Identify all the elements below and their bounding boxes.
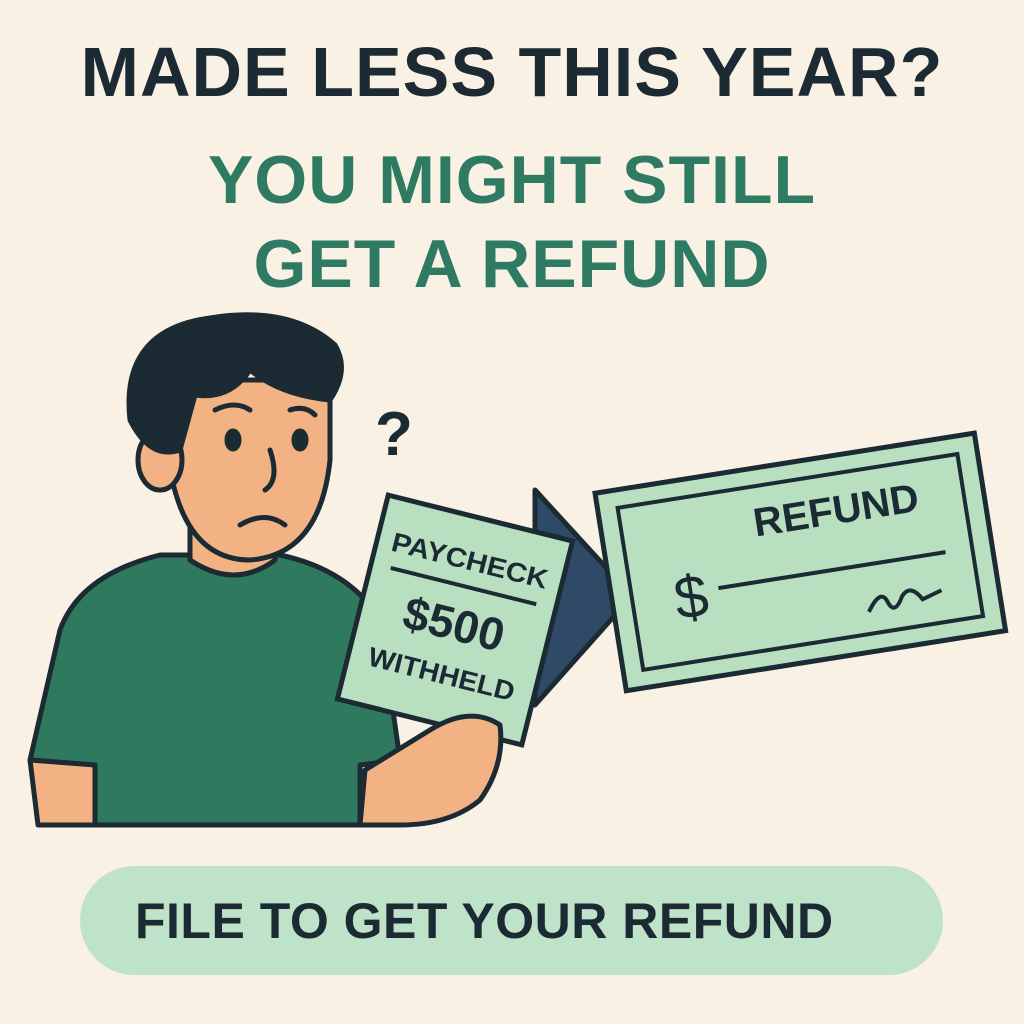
- subtitle teal: [208, 142, 816, 302]
- title line 1: MADE LESS THIS YEAR?: [81, 33, 943, 111]
- arrow: [535, 490, 632, 705]
- call to action button: FILE TO GET YOUR REFUND: [135, 893, 834, 949]
- refund check: [595, 433, 1006, 691]
- paycheck card: [337, 495, 573, 745]
- paycheck card: WITHHELD: [365, 642, 518, 707]
- subtitle teal: GET A REFUND: [254, 226, 770, 302]
- refund check: $: [669, 561, 713, 633]
- hand: [360, 716, 501, 825]
- paycheck card: $500: [398, 586, 510, 661]
- call to action button: [80, 866, 943, 975]
- paycheck card: PAYCHECK: [389, 527, 552, 595]
- subtitle teal: YOU MIGHT STILL: [208, 142, 816, 218]
- question mark: ?: [375, 400, 413, 469]
- person: [30, 315, 400, 825]
- refund check: REFUND: [750, 476, 922, 546]
